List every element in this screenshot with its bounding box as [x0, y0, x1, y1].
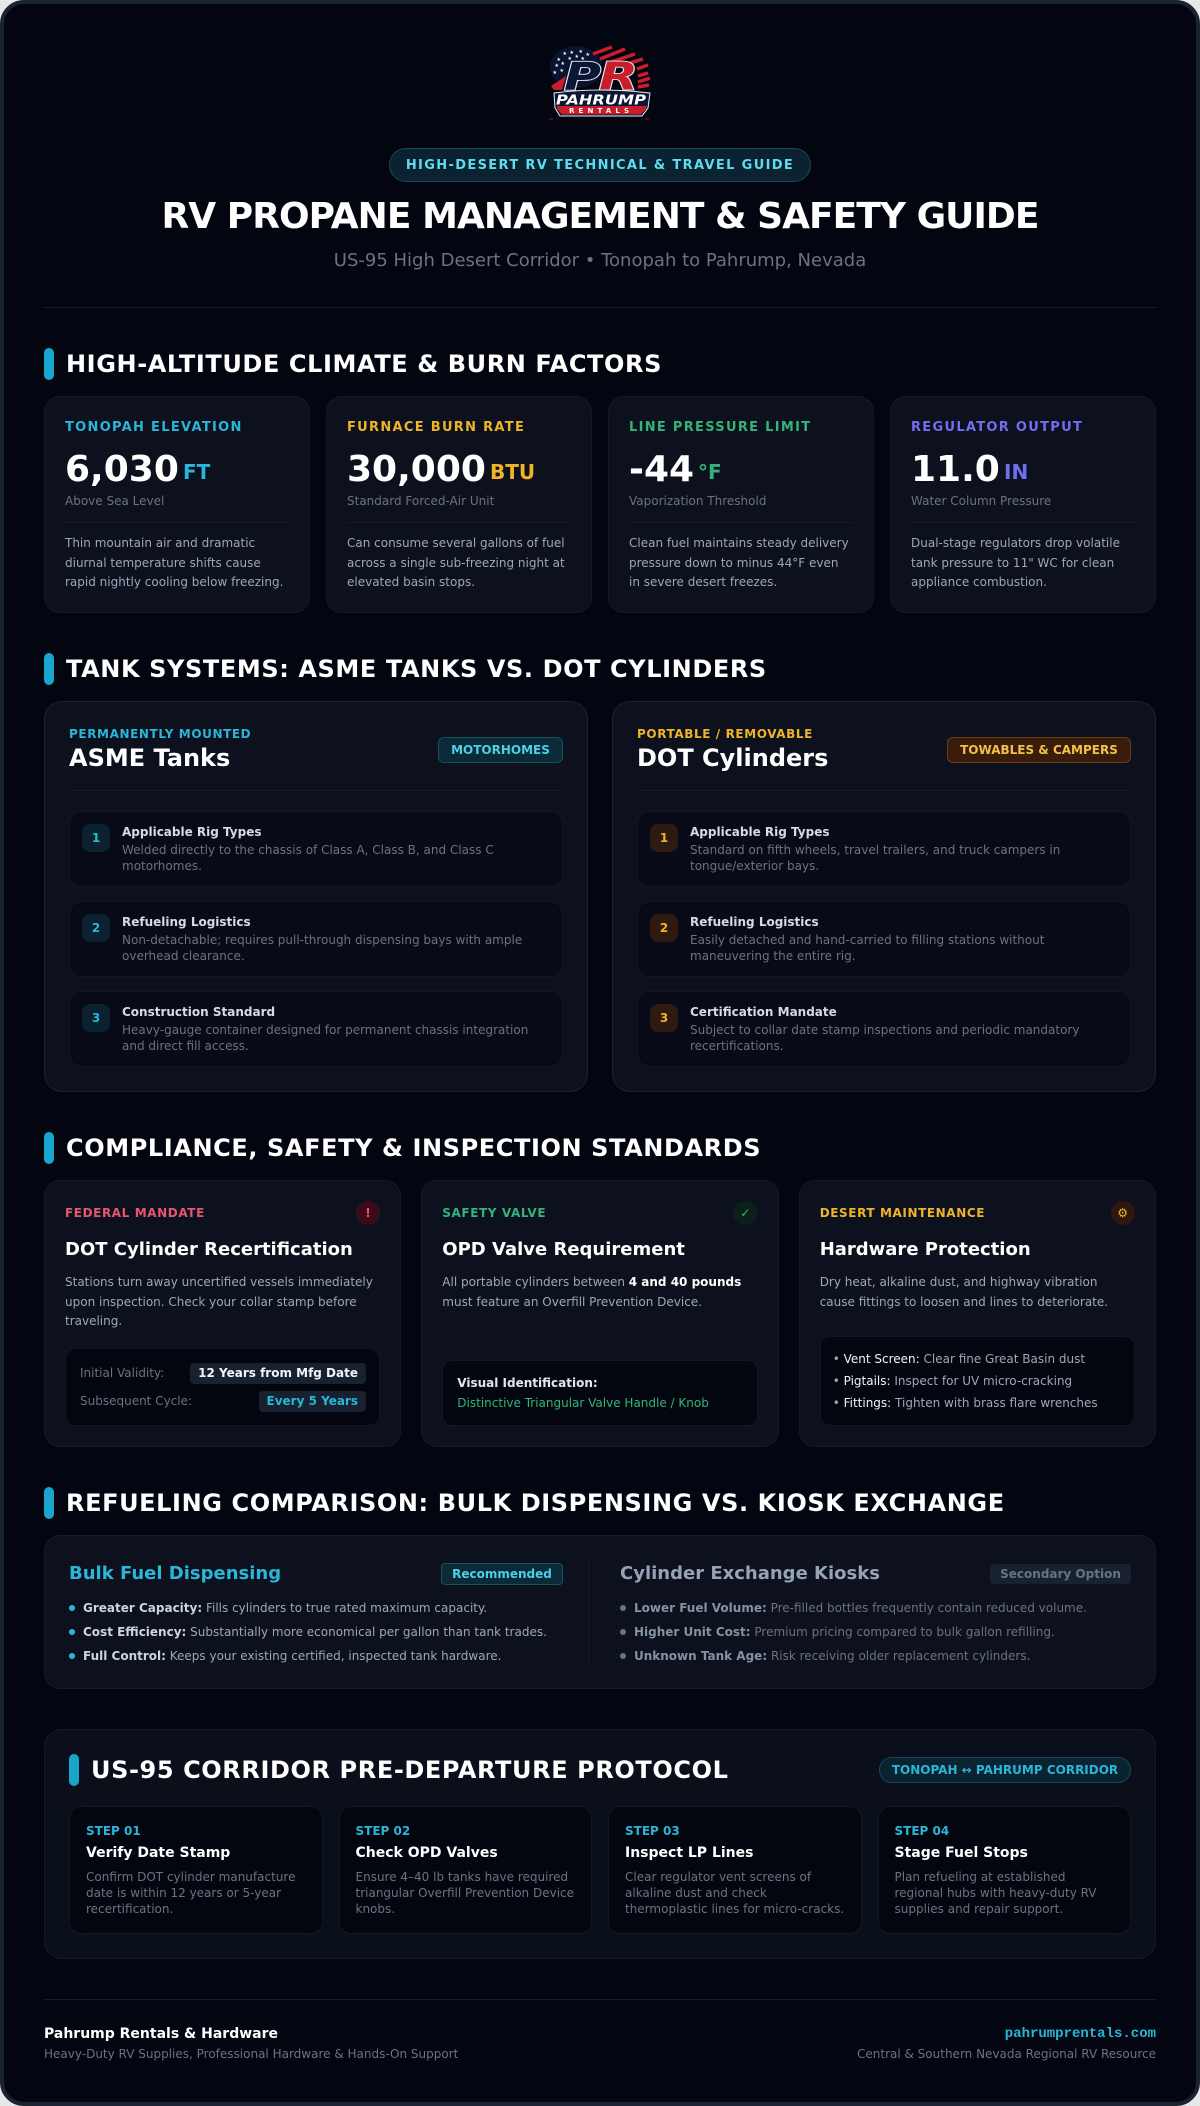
section: tank systems	[44, 653, 1156, 1092]
item: rig types: motorhomes.	[122, 859, 202, 873]
badge: towables: TOWABLES & CAMPERS	[960, 743, 1118, 757]
validity box: Subsequent Cycle:	[80, 1394, 192, 1408]
item: rig types: Standard on fifth wheels, travel trailers, and truck campers in	[690, 843, 1060, 857]
icon: Pahrump Rentals logo: P	[564, 54, 601, 98]
step 1	[69, 1806, 322, 1934]
item: rig types: Applicable Rig Types	[690, 825, 830, 839]
step 1: Verify Date Stamp	[86, 1845, 230, 1861]
step 3	[608, 1806, 862, 1934]
panel: regulator output: Dual-stage regulators drop volatile	[911, 536, 1120, 550]
header badge: HIGH-DESERT RV TECHNICAL & TRAVEL GUIDE	[406, 158, 794, 173]
icon: exclamation	[356, 1201, 380, 1225]
column: bulk dispensing: Cost Efficiency: Substantially more economical per gallon than tank trades.	[83, 1625, 547, 1639]
panel: line pressure limit: -44	[629, 449, 694, 490]
item: certification mandate: 3	[660, 1011, 668, 1025]
panel: regulator output: REGULATOR OUTPUT	[911, 420, 1083, 435]
panel: federal mandate: upon inspection. Check your collar stamp before	[65, 1294, 357, 1308]
icon: Pahrump Rentals logo: ★	[578, 49, 584, 55]
footer: region: Central & Southern Nevada Regional RV Resource	[857, 2047, 1156, 2061]
panel: safety valve: All portable cylinders between 4 and 40 pounds	[442, 1275, 741, 1289]
item: refueling logistics: overhead clearance.	[122, 949, 245, 963]
panel: line pressure limit: °F	[698, 460, 722, 484]
badge: motorhomes	[438, 737, 563, 763]
item: construction standard: and direct fill access.	[122, 1039, 249, 1053]
badge: secondary option: Secondary Option	[1000, 1567, 1121, 1581]
icon: Pahrump Rentals logo: ★	[570, 50, 574, 56]
item: rig types: Welded directly to the chassis of Class A, Class B, and Class C	[122, 843, 494, 857]
step 2: STEP 02	[356, 1824, 410, 1838]
badge: recommended: Recommended	[452, 1567, 552, 1581]
panel: safety valve: OPD Valve Requirement	[442, 1239, 685, 1260]
panel: safety valve	[421, 1180, 779, 1447]
panel: desert maintenance	[799, 1180, 1156, 1447]
column: bulk dispensing: Full Control: Keeps your existing certified, inspected tank hardware.	[83, 1649, 501, 1663]
panel: furnace burn rate: 30,000	[347, 449, 486, 490]
column: bulk dispensing: Bulk Fuel Dispensing	[69, 1563, 281, 1584]
item: certification mandate	[637, 991, 1131, 1067]
item: construction standard: Heavy-gauge container designed for permanent chassis integration	[122, 1023, 528, 1037]
step 2	[338, 1806, 592, 1934]
item: certification mandate: Certification Mandate	[690, 1005, 837, 1019]
column: exchange kiosks	[620, 1563, 1131, 1663]
subtitle: US-95 High Desert Corridor • Tonopah to Pahrump, Nevada	[334, 250, 866, 271]
item: rig types: 1	[92, 831, 100, 845]
panel: Tonopah elevation: 6,030	[65, 449, 179, 490]
panel: line pressure limit: Clean fuel maintains steady delivery	[629, 536, 849, 550]
badge: recommended	[441, 1563, 563, 1585]
panel: ASME tanks: PERMANENTLY MOUNTED	[69, 727, 251, 741]
panel: Tonopah elevation: TONOPAH ELEVATION	[65, 420, 243, 435]
footer: company tagline: Heavy-Duty RV Supplies, Professional Hardware & Hands-On Support	[44, 2047, 458, 2061]
icon: Pahrump Rentals logo: ★	[580, 56, 586, 62]
icon: Pahrump Rentals logo: ★	[556, 57, 562, 63]
panel: federal mandate: traveling.	[65, 1314, 122, 1328]
panel: Tonopah elevation: Thin mountain air and dramatic	[65, 536, 255, 550]
panel: furnace burn rate: Can consume several gallons of fuel	[347, 536, 565, 550]
column: exchange kiosks: Higher Unit Cost: Premium pricing compared to bulk gallon refilling.	[634, 1625, 1055, 1639]
icon: Pahrump Rentals logo: PAHRUMP	[556, 94, 647, 108]
badge: motorhomes: MOTORHOMES	[451, 743, 550, 757]
heading marker	[44, 1132, 54, 1164]
badge: corridor: TONOPAH ↔ PAHRUMP CORRIDOR	[892, 1763, 1118, 1777]
item: construction standard: Construction Standard	[122, 1005, 275, 1019]
step 3: Clear regulator vent screens of	[625, 1870, 811, 1884]
panel: safety valve: SAFETY VALVE	[442, 1206, 546, 1220]
item: refueling logistics: Non-detachable; requires pull-through dispensing bays with ample	[122, 933, 522, 947]
icon: check mark: ✓	[740, 1206, 750, 1220]
step 4: supplies and repair support.	[894, 1902, 1063, 1916]
step 2: Ensure 4–40 lb tanks have required	[356, 1870, 568, 1884]
section heading: HIGH-ALTITUDE CLIMATE & BURN FACTORS	[66, 350, 662, 378]
panel: federal mandate: Stations turn away uncertified vessels immediately	[65, 1275, 373, 1289]
item: refueling logistics: maneuvering the entire rig.	[690, 949, 856, 963]
panel: pre-departure protocol	[44, 1729, 1156, 1959]
panel: comparison	[44, 1535, 1156, 1689]
panel: Tonopah elevation: rapid nightly cooling below freezing.	[65, 575, 283, 589]
panel: ASME tanks	[44, 701, 588, 1092]
item: refueling logistics: 2	[660, 921, 668, 935]
icon: Pahrump Rentals logo: ★	[568, 56, 572, 62]
item: construction standard: 3	[92, 1011, 100, 1025]
checklist box: • Vent Screen: Clear fine Great Basin dust	[833, 1352, 1085, 1366]
footer: company name: Pahrump Rentals & Hardware	[44, 2026, 278, 2042]
panel: regulator output: Water Column Pressure	[911, 494, 1051, 508]
panel: federal mandate: FEDERAL MANDATE	[65, 1206, 205, 1220]
section heading: COMPLIANCE, SAFETY & INSPECTION STANDARDS	[66, 1134, 761, 1162]
badge: corridor	[879, 1757, 1131, 1783]
panel: regulator output: IN	[1004, 460, 1028, 484]
section: climate and burn factors	[44, 348, 1156, 613]
title: RV PROPANE MANAGEMENT & SAFETY GUIDE	[162, 196, 1038, 236]
section heading: TANK SYSTEMS: ASME TANKS VS. DOT CYLINDERS	[66, 655, 767, 683]
panel: federal mandate: DOT Cylinder Recertification	[65, 1239, 353, 1260]
item: refueling logistics: 2	[92, 921, 100, 935]
step 4: Stage Fuel Stops	[894, 1845, 1028, 1861]
badge: towables	[947, 737, 1131, 763]
panel: line pressure limit: pressure down to minus 44°F even	[629, 556, 838, 570]
icon: check mark	[733, 1201, 757, 1225]
step 3: Inspect LP Lines	[625, 1845, 753, 1861]
panel: regulator output: tank pressure to 11" WC for clean	[911, 556, 1114, 570]
panel: Tonopah elevation: diurnal temperature shifts cause	[65, 556, 261, 570]
panel: DOT cylinders: DOT Cylinders	[637, 744, 828, 772]
panel: furnace burn rate: BTU	[490, 460, 535, 484]
checklist box: • Fittings: Tighten with brass flare wrenches	[833, 1396, 1098, 1410]
icon: Pahrump Rentals logo: ★	[560, 61, 566, 67]
step 1: STEP 01	[86, 1824, 141, 1838]
column: exchange kiosks: Unknown Tank Age: Risk receiving older replacement cylinders.	[634, 1649, 1030, 1663]
section heading: US-95 CORRIDOR PRE-DEPARTURE PROTOCOL	[91, 1756, 729, 1784]
panel: furnace burn rate: elevated basin stops.	[347, 575, 475, 589]
panel: furnace burn rate: Standard Forced-Air Unit	[347, 494, 494, 508]
icon: Pahrump Rentals logo: ★	[554, 63, 560, 69]
panel: line pressure limit	[608, 396, 874, 613]
panel: furnace burn rate	[326, 396, 592, 613]
icon: Pahrump Rentals logo: ★	[562, 51, 568, 57]
column: exchange kiosks: Cylinder Exchange Kiosks	[620, 1563, 880, 1584]
panel: safety valve: must feature an Overfill Prevention Device.	[442, 1294, 702, 1308]
icon: Pahrump Rentals logo: ★	[552, 70, 558, 76]
header badge	[389, 148, 811, 182]
panel: Tonopah elevation: FT	[183, 460, 210, 484]
step 4: STEP 04	[894, 1824, 949, 1838]
step 3: STEP 03	[625, 1824, 680, 1838]
panel: desert maintenance: Hardware Protection	[820, 1239, 1031, 1260]
validity box	[65, 1348, 380, 1426]
panel: regulator output	[890, 396, 1156, 613]
item: certification mandate: recertifications.	[690, 1039, 784, 1053]
panel: DOT cylinders	[612, 701, 1156, 1092]
panel: Tonopah elevation: Above Sea Level	[65, 494, 164, 508]
footer	[44, 2026, 1156, 2061]
panel: furnace burn rate: across a single sub-freezing night at	[347, 556, 565, 570]
icon: Pahrump Rentals logo: R	[599, 54, 638, 98]
panel: line pressure limit: LINE PRESSURE LIMIT	[629, 420, 811, 435]
step 1: recertification.	[86, 1902, 173, 1916]
step 3: alkaline dust and check	[625, 1886, 767, 1900]
validity box: Every 5 Years	[266, 1394, 358, 1408]
step 1: date is within 12 years or 5-year	[86, 1886, 281, 1900]
checklist box: • Pigtails: Inspect for UV micro-cracking	[833, 1374, 1072, 1388]
panel: line pressure limit: Vaporization Threshold	[629, 494, 766, 508]
visual identification box: Distinctive Triangular Valve Handle / Knob	[457, 1396, 709, 1410]
item: rig types: tongue/exterior bays.	[690, 859, 819, 873]
step 4: Plan refueling at established	[894, 1870, 1066, 1884]
icon: Pahrump Rentals logo: ★	[586, 52, 590, 58]
panel: federal mandate	[44, 1180, 401, 1447]
badge: secondary option	[990, 1564, 1131, 1584]
step 3: thermoplastic lines for micro-cracks.	[625, 1902, 844, 1916]
heading marker	[44, 1487, 54, 1519]
section heading: REFUELING COMPARISON: BULK DISPENSING VS. KIOSK EXCHANGE	[66, 1489, 1005, 1517]
heading marker	[44, 348, 54, 380]
visual identification box	[442, 1360, 758, 1426]
validity box: Initial Validity:	[80, 1366, 164, 1380]
panel: line pressure limit: in severe desert freezes.	[629, 575, 777, 589]
item: rig types: 1	[660, 831, 668, 845]
item: rig types	[69, 811, 563, 887]
panel: ASME tanks: ASME Tanks	[69, 744, 230, 772]
icon: Pahrump Rentals logo: ★	[574, 54, 580, 60]
panel: desert maintenance: Dry heat, alkaline dust, and highway vibration	[820, 1275, 1097, 1289]
visual identification box: Visual Identification:	[457, 1376, 598, 1390]
step 2: Check OPD Valves	[356, 1845, 498, 1861]
panel: DOT cylinders: PORTABLE / REMOVABLE	[637, 727, 813, 741]
item: refueling logistics	[637, 901, 1131, 977]
heading marker	[69, 1754, 79, 1786]
panel: regulator output: 11.0	[911, 449, 1000, 490]
icon: gear	[1111, 1201, 1135, 1225]
icon: gear: ⚙	[1117, 1206, 1128, 1220]
item: refueling logistics	[69, 901, 563, 977]
icon: Pahrump Rentals logo	[549, 45, 651, 120]
panel: furnace burn rate: FURNACE BURN RATE	[347, 420, 525, 435]
step 2: knobs.	[356, 1902, 395, 1916]
icon: Pahrump Rentals logo: ★	[560, 68, 564, 74]
section: compliance	[44, 1132, 1156, 1447]
panel: desert maintenance: DESERT MAINTENANCE	[820, 1206, 985, 1220]
item: refueling logistics: Refueling Logistics	[690, 915, 819, 929]
item: rig types	[637, 811, 1131, 887]
item: rig types: Applicable Rig Types	[122, 825, 262, 839]
item: certification mandate: Subject to collar date stamp inspections and periodic mandatory	[690, 1023, 1079, 1037]
step 4: regional hubs with heavy-duty RV	[894, 1886, 1097, 1900]
heading marker	[44, 653, 54, 685]
item: refueling logistics: Refueling Logistics	[122, 915, 251, 929]
step 1: Confirm DOT cylinder manufacture	[86, 1870, 295, 1884]
footer: website: pahrumprentals.com	[1005, 2026, 1156, 2042]
panel: regulator output: appliance combustion.	[911, 575, 1047, 589]
step 2: triangular Overfill Prevention Device	[356, 1886, 574, 1900]
panel: Tonopah elevation	[44, 396, 310, 613]
icon: Pahrump Rentals logo: RENTALS	[569, 107, 629, 115]
column: bulk dispensing	[69, 1563, 563, 1663]
icon: exclamation: !	[365, 1206, 371, 1220]
item: refueling logistics: Easily detached and hand-carried to filling stations without	[690, 933, 1044, 947]
column: bulk dispensing: Greater Capacity: Fills cylinders to true rated maximum capacity.	[83, 1601, 487, 1615]
step 4	[878, 1806, 1131, 1934]
item: construction standard	[69, 991, 563, 1067]
column: exchange kiosks: Lower Fuel Volume: Pre-filled bottles frequently contain reduced volume.	[634, 1601, 1087, 1615]
validity box: 12 Years from Mfg Date	[198, 1366, 358, 1380]
checklist box	[820, 1336, 1135, 1426]
panel: desert maintenance: cause fittings to loosen and lines to deteriorate.	[820, 1294, 1108, 1308]
